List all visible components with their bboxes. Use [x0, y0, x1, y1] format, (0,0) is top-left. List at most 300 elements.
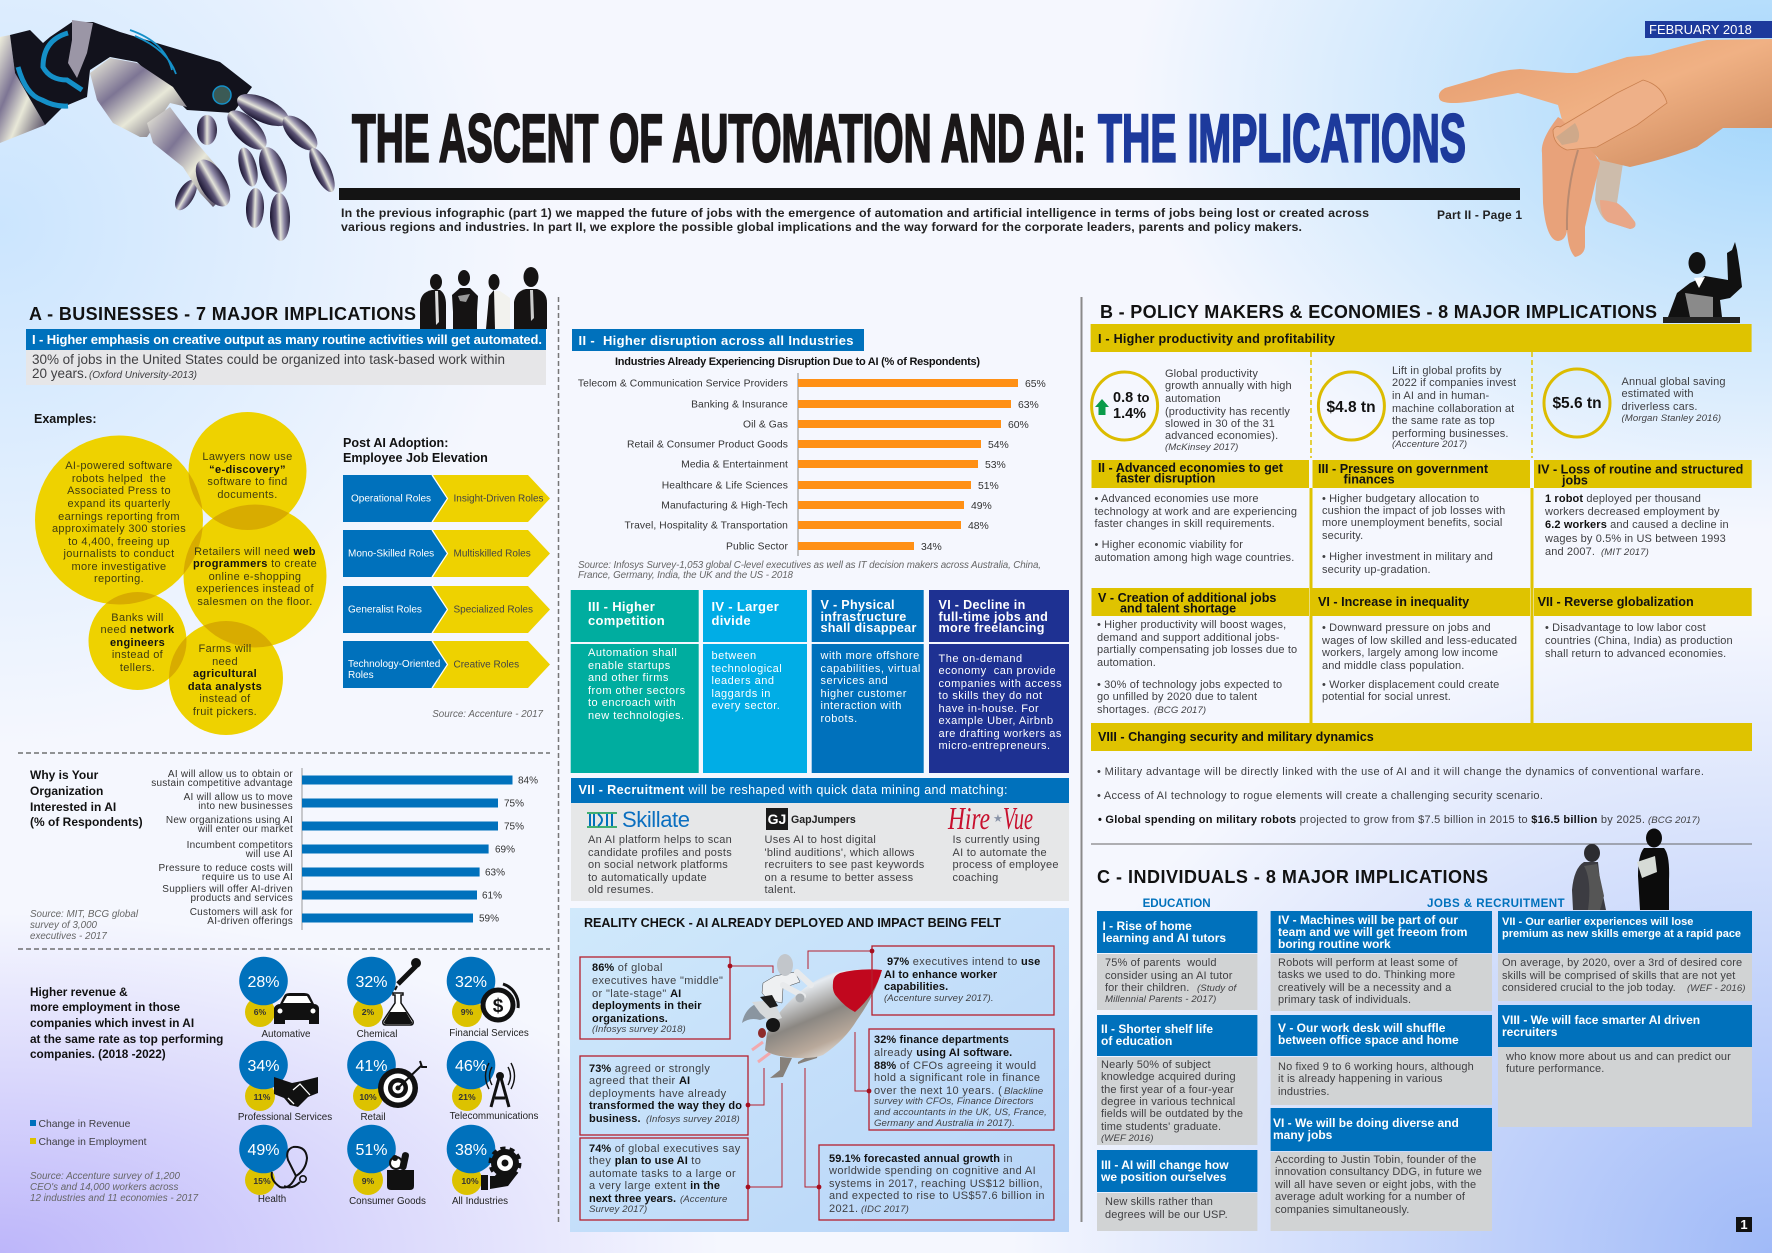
- job elevation heading: Post AI Adoption:: [343, 436, 448, 450]
- job elevation chevrons: Creative Roles: [454, 660, 519, 670]
- industry: professional services: 11%: [254, 1092, 271, 1102]
- B-I banner: I - Higher productivity and profitability: [1098, 332, 1335, 346]
- panel: III higher competition: and other firms: [588, 672, 669, 684]
- industry: all industries: 10%: [461, 1176, 479, 1186]
- examples: overlapping circles: reporting.: [94, 573, 144, 585]
- bar chart: disruption by industry: 34%: [921, 542, 942, 553]
- panel: III higher competition: III - Higher: [588, 599, 655, 614]
- panel: VII recruitment: talent.: [764, 884, 796, 896]
- C-VIII smarter recruiters: future performance.: [1506, 1063, 1604, 1075]
- panel: III higher competition: competition: [588, 613, 665, 628]
- A-I statement: 30% of jobs in the United States could be organized into task-based work within: [32, 352, 505, 367]
- panel: IV larger divide: leaders and: [712, 675, 774, 687]
- job elevation chevrons: Operational Roles: [351, 494, 431, 504]
- chart title: why interested: Organization: [30, 784, 103, 798]
- chart title: why interested: (% of Respondents): [30, 815, 143, 829]
- B-II advanced economies: automation among high wage countries.: [1094, 552, 1294, 564]
- bar chart: disruption by industry: Telecom & Communication Service Providers: [578, 378, 788, 390]
- examples: overlapping circles: tellers.: [120, 662, 155, 674]
- C-I home learning: I - Rise of home: [1102, 919, 1192, 933]
- B-VII reverse globalization: [1534, 588, 1752, 660]
- callout: 32%: 32% finance departments: [874, 1034, 1009, 1046]
- B-V additional jobs: • Higher productivity will boost wages,: [1097, 619, 1286, 631]
- examples: overlapping circles: journalists to conduct: [62, 548, 175, 560]
- B-I banner: [1091, 324, 1752, 352]
- B-VI inequality: VI - Increase in inequality: [1318, 595, 1469, 609]
- B-IV routine jobs: and 2007.: [1545, 546, 1595, 558]
- B-IV routine jobs: [1534, 460, 1752, 558]
- B-VI inequality: potential for social unrest.: [1322, 691, 1451, 703]
- stat: global profits: machine collaboration at: [1392, 403, 1514, 415]
- B-V additional jobs: • 30% of technology jobs expected to: [1097, 679, 1282, 691]
- chart title: why interested: Interested in AI: [30, 800, 116, 814]
- panel: VII recruitment: Is currently using: [952, 834, 1040, 846]
- bar chart: reasons for AI interest: will use AI: [245, 849, 293, 860]
- C-IV machines: tasks we used to do. Thinking more: [1278, 969, 1455, 981]
- panel: VI freelancing: example Uber, Airbnb: [938, 715, 1054, 727]
- source: Accenture survey: CEO's and 14,000 workers across: [30, 1182, 178, 1193]
- C-II shelf life: degree in various technical: [1101, 1096, 1235, 1108]
- chart title: disruption: Industries Already Experiencing Disruption Due to AI (% of Respondents): [615, 356, 980, 368]
- B-V additional jobs: demand and support additional jobs-: [1097, 632, 1280, 644]
- B-V additional jobs: [1092, 588, 1309, 716]
- stat: global profits: $4.8 tn: [1326, 399, 1376, 416]
- panel: V physical infrastructure: higher customer: [820, 688, 907, 700]
- C-VII earlier experiences: VII - Our earlier experiences will lose: [1502, 916, 1693, 928]
- examples: overlapping circles: documents.: [217, 489, 278, 501]
- bar chart: reasons for AI interest: 69%: [495, 844, 515, 856]
- callout: 73%: [580, 1056, 750, 1135]
- bar chart: disruption by industry: 63%: [1018, 400, 1039, 411]
- stat: global profits: the same rate as top: [1392, 415, 1495, 427]
- examples: overlapping circles: approximately 300 stories: [52, 523, 186, 535]
- panel: VII recruitment: Uses AI to host digital: [764, 834, 876, 846]
- panel: III higher competition: Automation shall: [588, 647, 677, 659]
- stat: global profits: 2022 if companies invest: [1392, 377, 1516, 389]
- B-II advanced economies: faster changes in skill requirements.: [1094, 518, 1275, 530]
- industry: telecommunications: Telecommunications: [450, 1111, 538, 1122]
- callout: 86%: [580, 957, 732, 1039]
- C-II shelf life: [1097, 1015, 1257, 1145]
- stat: annual saving: (Morgan Stanley 2016): [1622, 413, 1721, 424]
- B-III government finances: security.: [1322, 530, 1363, 542]
- logo: Skillate: [587, 807, 690, 832]
- logo: HireVue: ★: [993, 813, 1003, 825]
- bar chart: disruption by industry: 48%: [968, 521, 989, 532]
- panel: VI freelancing: to skills they do not: [938, 690, 1043, 702]
- examples: overlapping circles: Associated Press to: [67, 485, 171, 497]
- B-VI inequality: • Worker displacement could create: [1322, 679, 1499, 691]
- reality check heading: REALITY CHECK - AI ALREADY DEPLOYED AND IMPACT BEING FELT: [584, 916, 1001, 930]
- bar chart: disruption by industry: [578, 373, 1046, 556]
- examples: overlapping circles: AI-powered software: [65, 460, 173, 472]
- stat: annual saving: $5.6 tn: [1552, 395, 1602, 412]
- job elevation chevrons: Technology-Oriented: [348, 659, 440, 670]
- industry: health: [239, 1125, 307, 1205]
- C-V work desk: it is already happening in various: [1278, 1073, 1443, 1085]
- B-VI inequality: wages of low skilled and less-educated: [1321, 635, 1517, 647]
- A-II banner: [572, 329, 864, 351]
- logo: GapJumpers: GapJumpers: [791, 814, 856, 826]
- C-VI diverse jobs: many jobs: [1273, 1128, 1333, 1142]
- B-III government finances: [1312, 460, 1530, 576]
- B-VIII security dynamics: • Global spending on military robots projected to grow from $7.5 billion in 2015 to $16.5 billion by 2025.: [1098, 814, 1645, 826]
- callout: 97%: [870, 946, 1054, 1015]
- industry: financial services: 32%: [455, 974, 487, 991]
- stat: global profits: performing businesses.: [1392, 428, 1509, 440]
- stat: productivity: 1.4%: [1113, 406, 1146, 422]
- stat: productivity: (McKinsey 2017): [1165, 442, 1238, 453]
- C-III positioning: [1097, 1150, 1257, 1231]
- examples: overlapping circles: data analysts: [188, 681, 262, 693]
- panel: reality check: [570, 908, 1069, 1232]
- industry: chemical: Chemical: [357, 1029, 397, 1040]
- job elevation chevrons: Insight-Driven Roles: [454, 494, 544, 504]
- examples: overlapping circles: instead of: [112, 649, 164, 661]
- section heading B: B - POLICY MAKERS & ECONOMIES - 8 MAJOR IMPLICATIONS: [1100, 302, 1657, 322]
- panel: IV larger divide: divide: [712, 613, 751, 628]
- B-VIII security dynamics: (BCG 2017): [1648, 815, 1700, 826]
- C-IV machines: Robots will perform at least some of: [1278, 957, 1458, 969]
- panel: VII recruitment: [571, 778, 1069, 901]
- C-VII earlier experiences: [1498, 911, 1752, 1001]
- examples: overlapping circles: fruit pickers.: [193, 706, 257, 718]
- callout: 97%: (Accenture survey 2017).: [884, 993, 994, 1004]
- industry: all industries: All Industries: [452, 1196, 508, 1207]
- panel: VII recruitment: recruiters to see past keywords: [764, 859, 925, 871]
- panel: VII recruitment: 'blind auditions', which allows: [764, 847, 915, 859]
- B-III government finances: III - Pressure on government: [1318, 462, 1489, 476]
- logo: HireVue: Hire: [947, 800, 990, 836]
- industry: professional services: [238, 1041, 332, 1123]
- examples: overlapping circles: software to find: [207, 476, 288, 488]
- callout: 73%: agreed that their AI: [589, 1075, 690, 1087]
- intro text: [341, 206, 1369, 234]
- B-VI inequality: and middle class population.: [1322, 660, 1464, 672]
- industry: professional services: Professional Services: [238, 1112, 332, 1123]
- chart source: MIT BCG: executives - 2017: [30, 931, 107, 942]
- callout: 59.1%: 2021.: [829, 1203, 858, 1215]
- C-VI diverse jobs: According to Justin Tobin, founder of the: [1275, 1154, 1476, 1166]
- callout: 73%: 73% agreed or strongly: [589, 1063, 710, 1075]
- panel: V physical infrastructure: shall disappear: [820, 621, 917, 635]
- panel: IV larger divide: every sector.: [712, 700, 780, 712]
- panel: VI freelancing: micro-entrepreneurs.: [938, 740, 1051, 752]
- industry: consumer goods: 51%: [355, 1142, 388, 1159]
- callout: 74%: next three years.: [589, 1193, 676, 1205]
- C-VIII smarter recruiters: [1498, 1005, 1752, 1127]
- C-VII earlier experiences: On average, by 2020, over a 3rd of desired core: [1502, 957, 1742, 969]
- industry: all industries: 38%: [455, 1142, 487, 1159]
- callout: 74%: Survey 2017): [589, 1204, 647, 1215]
- callout: 74%: [580, 1138, 750, 1220]
- industry: consumer goods: 9%: [362, 1176, 375, 1186]
- C-VII earlier experiences: considered crucial to the job today.: [1502, 982, 1676, 994]
- logo: GapJumpers: GJ: [768, 811, 786, 827]
- panel: VI freelancing: more freelancing: [938, 621, 1045, 635]
- B-II advanced economies: faster disruption: [1116, 472, 1215, 486]
- industry: financial services: 9%: [461, 1007, 474, 1017]
- examples: overlapping circles: experiences instead of: [196, 583, 314, 595]
- stat: productivity: (productivity has recently: [1165, 406, 1290, 418]
- legend: Change in Revenue: [38, 1119, 131, 1130]
- higher revenue statement: at the same rate as top performing: [30, 1032, 223, 1046]
- bar chart: reasons for AI interest: products and services: [190, 893, 293, 904]
- C-IV machines: boring routine work: [1278, 937, 1391, 951]
- industry: financial services: $: [493, 996, 504, 1017]
- B-V additional jobs: and talent shortage: [1120, 602, 1236, 616]
- bar chart: reasons for AI interest: AI-driven offerings: [207, 916, 293, 927]
- callout: 74%: automate tasks to a large or: [589, 1168, 736, 1180]
- panel: VI freelancing: are drafting workers as: [938, 728, 1062, 740]
- callout: 32%: survey with CFOs, Finance Directors: [874, 1096, 1034, 1107]
- B-IV routine jobs: (MIT 2017): [1601, 547, 1649, 558]
- bar chart: reasons for AI interest: require us to use AI: [202, 872, 293, 883]
- panel: VI freelancing: VI - Decline in: [938, 598, 1026, 612]
- panel: IV larger divide: [703, 590, 807, 773]
- stat: productivity: slowed in 30 of the 31: [1165, 418, 1275, 430]
- callout: 97%: capabilities.: [884, 981, 948, 993]
- B-II advanced economies: • Higher economic viability for: [1094, 539, 1243, 551]
- examples: overlapping circles: earnings reporting from: [58, 511, 180, 523]
- bar chart: reasons for AI interest: Pressure to reduce costs will: [158, 863, 293, 874]
- callout: 59.1%: [817, 1145, 1054, 1220]
- panel: V physical infrastructure: capabilities, virtual: [820, 663, 921, 675]
- C-V work desk: between office space and home: [1278, 1033, 1459, 1047]
- job elevation chevrons: [343, 475, 550, 688]
- callout: 59.1%: worldwide spending on cognitive and AI: [828, 1165, 1036, 1177]
- C-VII earlier experiences: premium as new skills emerge at a rapid pace: [1502, 928, 1741, 940]
- industry: automative: 28%: [247, 974, 280, 991]
- industry: retail: [347, 1041, 427, 1123]
- stat: global profits: [1318, 365, 1516, 450]
- panel: III higher competition: from other sectors: [588, 685, 686, 697]
- section heading A: A - BUSINESSES - 7 MAJOR IMPLICATIONS: [29, 304, 416, 324]
- B-II advanced economies: [1092, 460, 1309, 564]
- B-III government finances: finances: [1344, 472, 1395, 486]
- examples: overlapping circles: robots helped the: [72, 473, 166, 485]
- examples: overlapping circles: online e-shopping: [209, 571, 301, 583]
- industry: retail: Retail: [360, 1112, 386, 1123]
- source: Infosys: [578, 560, 1041, 581]
- bar chart: reasons for AI interest: 84%: [518, 776, 538, 786]
- examples: overlapping circles: Retailers will need web: [194, 546, 316, 558]
- C-V work desk: [1271, 1015, 1492, 1105]
- C-III positioning: degrees will be our USP.: [1105, 1209, 1228, 1221]
- panel: VII recruitment: AI to automate the: [952, 847, 1047, 859]
- source: Accenture: Source: Accenture - 2017: [432, 709, 544, 720]
- B-IV routine jobs: 6.2 workers and caused a decline in: [1545, 519, 1729, 531]
- B-IV routine jobs: 1 robot deployed per thousand: [1545, 493, 1701, 505]
- panel: VII recruitment: old resumes.: [588, 884, 654, 896]
- silhouettes: business people: [420, 267, 547, 329]
- bar chart: disruption by industry: Banking & Insurance: [691, 400, 788, 410]
- panel: VI freelancing: full-time jobs and: [938, 610, 1048, 624]
- panel: III higher competition: [571, 590, 699, 773]
- C-I home learning: consider using an AI tutor: [1105, 970, 1233, 982]
- title rule: [339, 188, 1520, 200]
- stat: global profits: in AI and in human-: [1392, 390, 1489, 402]
- stat: annual saving: Annual global saving: [1622, 376, 1726, 388]
- bar chart: disruption by industry: 54%: [988, 440, 1009, 451]
- industry: professional services: 34%: [247, 1058, 280, 1075]
- bar chart: reasons for AI interest: New organizations using AI: [166, 815, 293, 826]
- panel: III higher competition: new technologies.: [588, 710, 685, 722]
- panel: V physical infrastructure: services and: [820, 675, 888, 687]
- page part label: Part II - Page 1: [1437, 208, 1522, 222]
- silhouette: students: [1572, 828, 1669, 910]
- C-IV machines: primary task of individuals.: [1278, 994, 1411, 1006]
- B-II advanced economies: technology at work and are experiencing: [1094, 506, 1297, 518]
- callout: 32%: Blackline: [1004, 1086, 1043, 1097]
- B-VII reverse globalization: countries (China, India) as production: [1545, 635, 1733, 647]
- examples: overlapping circles: Banks will: [111, 612, 164, 624]
- B-VI inequality: • Downward pressure on jobs and: [1322, 622, 1491, 634]
- C-II shelf life: II - Shorter shelf life: [1101, 1022, 1213, 1036]
- examples: overlapping circles: need network: [101, 624, 174, 636]
- higher revenue statement: companies. (2018 -2022): [30, 1047, 166, 1061]
- C-VIII smarter recruiters: VIII - We will face smarter AI driven: [1502, 1013, 1700, 1027]
- rocket with robot rider: [742, 954, 882, 1078]
- examples: overlapping circles: Farms will: [198, 643, 252, 655]
- source: Infosys: Source: Infosys Survey-1,053 global C-level executives as well as IT decision makers across Australia, China,: [578, 560, 1041, 571]
- bar chart: reasons for AI interest: Incumbent competitors: [187, 840, 293, 851]
- C-I home learning: learning and AI tutors: [1102, 931, 1226, 945]
- panel: VII recruitment: VII - Recruitment will be reshaped with quick data mining and matching:: [578, 783, 1008, 797]
- B-II advanced economies: II - Advanced economies to get: [1098, 461, 1284, 475]
- higher revenue statement: companies which invest in AI: [30, 1016, 194, 1030]
- industry: telecommunications: [447, 1041, 538, 1122]
- bar chart: disruption by industry: 60%: [1008, 420, 1029, 431]
- panel: VII recruitment: coaching: [952, 872, 999, 884]
- bar chart: disruption by industry: Public Sector: [726, 542, 788, 552]
- A-I banner: I - Higher emphasis on creative output as many routine activities will get automated.: [32, 332, 542, 347]
- bar chart: disruption by industry: 49%: [971, 501, 992, 512]
- panel: VII recruitment: An AI platform helps to scan: [588, 834, 732, 846]
- callout: 86%: 86% of global: [592, 962, 663, 974]
- C-IV machines: [1271, 911, 1492, 1011]
- callout: 32%: [867, 1029, 1054, 1130]
- page number: [1736, 1217, 1752, 1232]
- B-III government finances: • Higher budgetary allocation to: [1322, 493, 1479, 505]
- panel: VII recruitment: process of employee: [952, 859, 1059, 871]
- bar chart: disruption by industry: 65%: [1025, 379, 1046, 390]
- panel: III higher competition: to encroach with: [588, 697, 676, 709]
- connector lines: [730, 951, 872, 1187]
- stat: global profits: (Accenture 2017): [1392, 439, 1467, 450]
- B-VIII security dynamics: • Military advantage will be directly linked with the use of AI and it will change the dynamics of conventional warfare.: [1097, 766, 1704, 778]
- job elevation heading: Employee Job Elevation: [343, 451, 488, 465]
- C-VI diverse jobs: innovation consultancy DDG, in future we: [1275, 1166, 1482, 1178]
- C-I home learning: Millennial Parents - 2017): [1105, 994, 1216, 1005]
- B-IV routine jobs: wages by 0.5% in US between 1993: [1544, 533, 1726, 545]
- B-VIII security dynamics: [1091, 723, 1752, 826]
- page number: 1: [1740, 1217, 1748, 1232]
- legend: [30, 1119, 147, 1148]
- C-VIII smarter recruiters: recruiters: [1502, 1025, 1558, 1039]
- C-VI diverse jobs: companies simultaneously.: [1275, 1204, 1410, 1216]
- C-II shelf life: fields will be outdated by the: [1101, 1108, 1243, 1120]
- B-V additional jobs: (BCG 2017): [1154, 705, 1206, 716]
- C-IV machines: team and we will get freeom from: [1278, 925, 1467, 939]
- callout: 73%: business.: [589, 1113, 641, 1125]
- industry: health: Health: [258, 1194, 286, 1205]
- title: THE ASCENT OF AUTOMATION AND AI:: [352, 100, 1086, 176]
- C-II shelf life: time students' graduate.: [1101, 1121, 1221, 1133]
- C-VI diverse jobs: [1271, 1108, 1492, 1231]
- examples: overlapping circles: Lawyers now use: [202, 451, 293, 463]
- B-II advanced economies: • Advanced economies use more: [1094, 493, 1259, 505]
- C-VI diverse jobs: VI - We will be doing diverse and: [1273, 1116, 1459, 1130]
- job elevation chevrons: Roles: [348, 670, 374, 681]
- industry: automative: Automative: [261, 1029, 311, 1040]
- panel: V physical infrastructure: infrastructure: [820, 610, 907, 624]
- industry: chemical: [347, 957, 421, 1040]
- callout: 59.1%: and expected to rise to US$57.6 billion in: [829, 1190, 1045, 1202]
- bar chart: disruption by industry: 53%: [985, 460, 1006, 471]
- B-VII reverse globalization: VII - Reverse globalization: [1538, 595, 1694, 609]
- bar chart: reasons for AI interest: 75%: [504, 798, 524, 810]
- examples: overlapping circles: engineers: [110, 637, 165, 649]
- examples: overlapping circles: expand its quarterly: [68, 498, 171, 510]
- logo: HireVue: Vue: [1003, 800, 1033, 836]
- chart title: why interested: Why is Your: [30, 768, 99, 782]
- stat: global profits: Lift in global profits by: [1392, 365, 1502, 377]
- bar chart: disruption by industry: Travel, Hospitality & Transportation: [625, 520, 788, 532]
- C-III positioning: we position ourselves: [1100, 1170, 1227, 1184]
- panel: VI freelancing: [929, 590, 1069, 773]
- C-I home learning: [1097, 911, 1257, 1010]
- bar chart: reasons for AI interest: Suppliers will offer AI-driven: [162, 884, 293, 895]
- bar chart: disruption by industry: Oil & Gas: [743, 420, 788, 430]
- B-V additional jobs: partially compensating job losses due to: [1097, 644, 1297, 656]
- callout: 32%: and accountants in the UK, US, France,: [874, 1107, 1047, 1118]
- C-VI diverse jobs: average adult working for a number of: [1275, 1191, 1466, 1203]
- callout: 73%: transformed the way they do: [589, 1100, 742, 1112]
- C-II shelf life: Nearly 50% of subject: [1101, 1059, 1211, 1071]
- B-IV routine jobs: workers decreased employment by: [1544, 506, 1720, 518]
- callout: 97%: 97% executives intend to use: [887, 956, 1040, 968]
- panel: VII recruitment: on social network platforms: [588, 859, 728, 871]
- panel: VI freelancing: companies with access: [938, 678, 1062, 690]
- A-I statement: 20 years.: [32, 366, 88, 381]
- examples: overlapping circles: “e-discovery”: [209, 464, 286, 476]
- C-II shelf life: the first year of a four-year: [1101, 1084, 1234, 1096]
- C-II shelf life: of education: [1101, 1034, 1172, 1048]
- C-II shelf life: knowledge acquired during: [1101, 1071, 1236, 1083]
- chart source: MIT BCG: Source: MIT, BCG global: [30, 909, 139, 920]
- source: Accenture survey: 12 industries and 11 economies - 2017: [30, 1193, 199, 1204]
- B-VI inequality: [1312, 588, 1530, 703]
- panel: VII recruitment: candidate profiles and posts: [588, 847, 732, 859]
- C-VI diverse jobs: will all have seven or eight jobs, with the: [1274, 1179, 1476, 1191]
- C-I home learning: 75% of parents would: [1105, 957, 1217, 969]
- callout: 32%: hold a significant role in finance: [874, 1072, 1040, 1084]
- stat: productivity: growth annually with high: [1165, 380, 1292, 392]
- stat: productivity: Global productivity: [1165, 368, 1258, 380]
- callout: 97%: AI to enhance worker: [884, 969, 998, 981]
- bar chart: disruption by industry: Media & Entertainment: [681, 460, 788, 470]
- industry: chemical: 32%: [355, 974, 388, 991]
- section heading C: C - INDIVIDUALS - 8 MAJOR IMPLICATIONS: [1097, 867, 1488, 887]
- panel: VI freelancing: The on-demand: [938, 653, 1023, 665]
- industry: automative: 6%: [254, 1007, 267, 1017]
- logo: HireVue: [947, 800, 1033, 836]
- callout: 74%: they plan to use AI to: [589, 1155, 701, 1167]
- callout: 59.1%: (IDC 2017): [861, 1204, 909, 1215]
- panel: VII recruitment: to automatically update: [588, 872, 707, 884]
- stat: annual saving: estimated with: [1622, 388, 1694, 400]
